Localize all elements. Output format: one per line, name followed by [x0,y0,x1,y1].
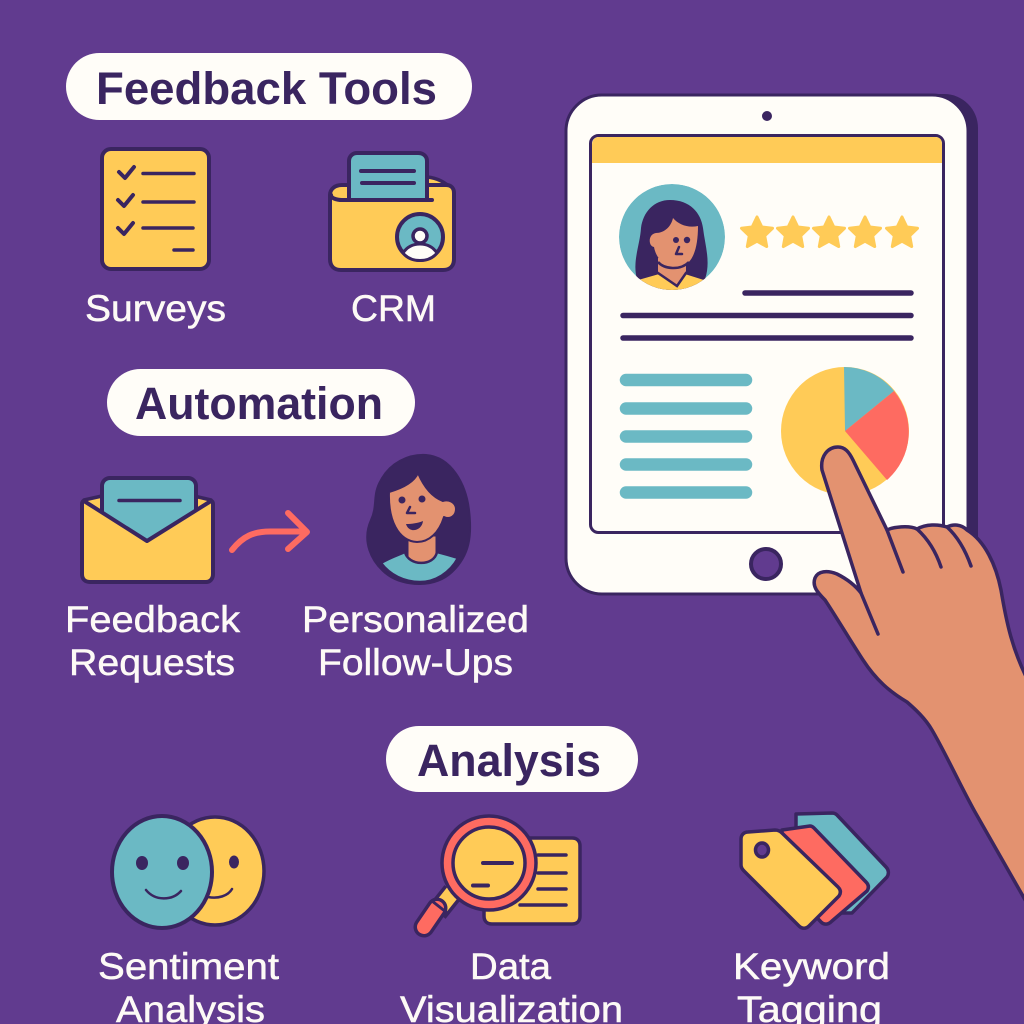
heading: Automation: Automation [135,378,383,429]
illustration: pointing hand [814,447,1024,912]
label: Keyword Tagging: Keyword [733,946,890,987]
label: Data Visualization: Data [470,946,551,987]
tablet shadow [578,94,978,594]
label: CRM: CRM [351,288,436,329]
label: Sentiment Analysis: Sentiment [98,946,280,987]
label: Sentiment Analysis [98,946,280,1024]
label: Personalized Follow-Ups: Follow-Ups [318,642,513,683]
avatar: reviewer [619,184,725,292]
label: Keyword Tagging [733,946,890,1024]
tablet home button [751,549,781,579]
heading: Feedback Tools: Feedback Tools [96,63,437,114]
label: Personalized Follow-Ups: Personalized [302,599,529,640]
icon: envelope [82,478,213,582]
five star rating [742,217,918,246]
data list bars [626,380,746,492]
icon: survey checklist [102,149,209,269]
screen header bar [592,137,942,163]
icon: sentiment faces [112,816,264,928]
label: Surveys: Surveys [85,288,226,329]
heading: Feedback Tools [66,53,472,120]
label: Feedback Requests: Requests [69,642,235,683]
label: Feedback Requests: Feedback [65,599,241,640]
review text lines [623,293,911,338]
icon: smiling person [367,455,470,584]
panel: tablet [566,94,978,594]
pie chart [781,367,909,495]
heading: Analysis: Analysis [417,735,601,786]
label: Personalized Follow-Ups [302,599,529,683]
heading: Automation [107,369,415,436]
icon: keyword tags [741,813,888,928]
arrow: flow to follow-ups [232,513,307,550]
heading: Analysis [386,726,638,792]
tablet camera [762,111,772,121]
label: Feedback Requests [65,599,241,683]
icon: CRM folder [330,153,454,270]
tablet body [566,95,968,594]
tablet screen [590,136,944,532]
label: Data Visualization [400,946,623,1024]
icon: data magnifier [424,816,580,927]
